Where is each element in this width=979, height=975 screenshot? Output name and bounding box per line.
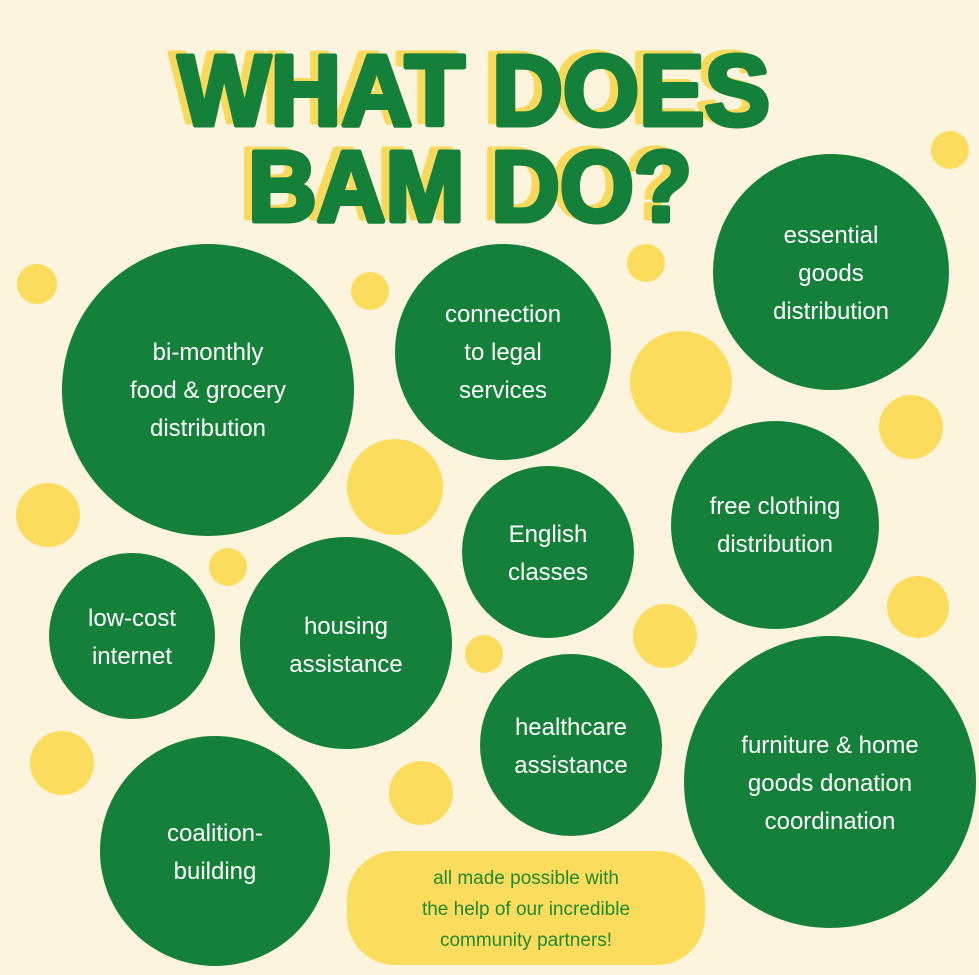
circle: healthcare assistance: healthcare	[515, 714, 627, 741]
circle: bi-monthly food: food & grocery	[130, 377, 286, 404]
circle: low-cost internet: internet	[92, 643, 172, 670]
circle: English classes	[462, 466, 634, 638]
circle: housing assistance: housing	[304, 613, 388, 640]
circle: coalition-building: coalition-	[167, 820, 263, 847]
circle: housing assistance: assistance	[289, 651, 403, 678]
circle: essential goods: goods	[798, 260, 864, 287]
callout: community partners: the help of our incredible	[422, 899, 630, 920]
circle: low-cost internet	[49, 553, 215, 719]
circle: housing assistance	[240, 537, 452, 749]
title	[170, 32, 770, 243]
circle: legal services	[395, 244, 611, 460]
title: WHAT DOES	[178, 35, 770, 147]
title: BAM DO?	[240, 128, 684, 240]
circle: essential goods: distribution	[773, 298, 889, 325]
title: BAM DO?	[248, 131, 692, 243]
circle: English classes: classes	[508, 559, 588, 586]
circle: essential goods: essential	[784, 222, 878, 249]
circle: free clothing: free clothing	[710, 493, 840, 520]
circle: free clothing	[671, 421, 879, 629]
circle: coalition-building: building	[174, 858, 256, 885]
title: WHAT DOES	[170, 32, 762, 144]
circle: bi-monthly food: distribution	[150, 415, 266, 442]
callout: community partners	[347, 851, 705, 965]
circle: legal services: to legal	[464, 339, 542, 366]
circle: furniture: furniture & home	[741, 732, 919, 759]
circle: furniture	[684, 636, 976, 928]
circle: bi-monthly food	[62, 244, 354, 536]
circle: healthcare assistance: assistance	[514, 752, 628, 779]
circle: coalition-building	[100, 736, 330, 966]
circle: English classes: English	[509, 521, 587, 548]
circle: furniture: coordination	[765, 808, 895, 835]
circle: free clothing: distribution	[717, 531, 833, 558]
circle: low-cost internet: low-cost	[88, 605, 176, 632]
yellow accent dots	[16, 131, 969, 825]
circle: legal services: services	[459, 377, 547, 404]
callout: community partners: all made possible with	[433, 868, 619, 889]
circle: bi-monthly food: bi-monthly	[153, 339, 263, 366]
circle: healthcare assistance	[480, 654, 662, 836]
circle: essential goods	[713, 154, 949, 390]
circle: furniture: goods donation	[748, 770, 912, 797]
callout: community partners: community partners!	[440, 930, 612, 951]
circle: legal services: connection	[445, 301, 561, 328]
